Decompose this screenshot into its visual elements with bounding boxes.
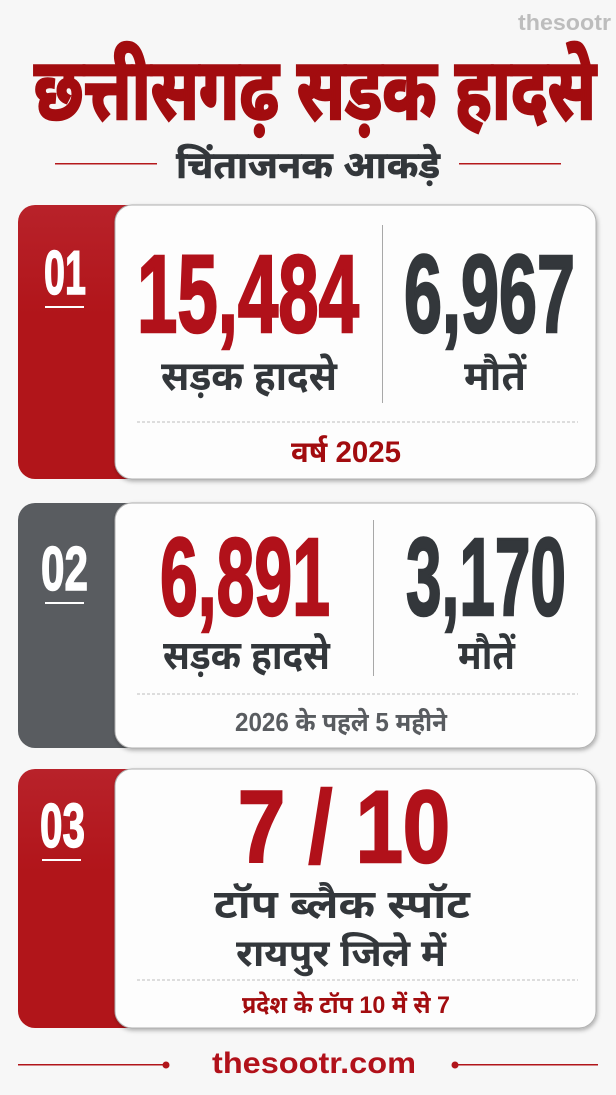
panel: card 01 — [18, 205, 596, 479]
stat: road accidents 2025: सड़क हादसे — [161, 352, 338, 399]
panel: card 02 — [18, 503, 596, 748]
stat: deaths 2025 — [404, 233, 575, 399]
divider — [373, 520, 374, 676]
heading: top black spots: टॉप ब्लैक स्पॉट — [214, 881, 472, 927]
number tab 03 — [18, 769, 148, 1028]
white card body — [115, 205, 596, 479]
caption: year 2025: वर्ष 2025 — [291, 435, 401, 469]
stat: road accidents 2025 — [137, 233, 359, 399]
number tab 01: 01 — [44, 239, 86, 308]
white card body — [115, 503, 596, 748]
stat: deaths 2026: मौतें — [458, 633, 516, 678]
footer: website with rules: thesootr.com — [212, 1047, 416, 1080]
footer: website with rules — [18, 1047, 598, 1080]
stat: road accidents 2026: 6,891 — [160, 516, 330, 639]
caption: 7 of state top 10: प्रदेश के टॉप 10 में से 7 — [242, 991, 450, 1019]
divider — [382, 225, 383, 403]
number tab 01 — [18, 205, 148, 479]
stat: deaths 2026 — [406, 516, 566, 678]
stat: 7 of 10: 7 / 10 — [238, 770, 450, 884]
stat: road accidents 2026 — [160, 516, 331, 678]
number tab 02: 02 — [41, 535, 88, 604]
subtitle with rules: चिंताजनक आकड़े — [176, 143, 441, 187]
number tab 02 — [18, 503, 148, 748]
number tab 03: 03 — [40, 792, 85, 861]
stat: deaths 2025: मौतें — [464, 353, 528, 399]
stat: road accidents 2026: सड़क हादसे — [163, 633, 331, 678]
caption: first 5 months of 2026: 2026 के पहले 5 महीने — [235, 707, 448, 737]
watermark: thesootr: thesootr — [518, 10, 611, 35]
heading: in Raipur district: रायपुर जिले में — [236, 931, 447, 977]
panel: card 03 — [18, 769, 596, 1028]
white card body — [115, 769, 596, 1028]
stat: road accidents 2025: 15,484 — [137, 233, 359, 356]
